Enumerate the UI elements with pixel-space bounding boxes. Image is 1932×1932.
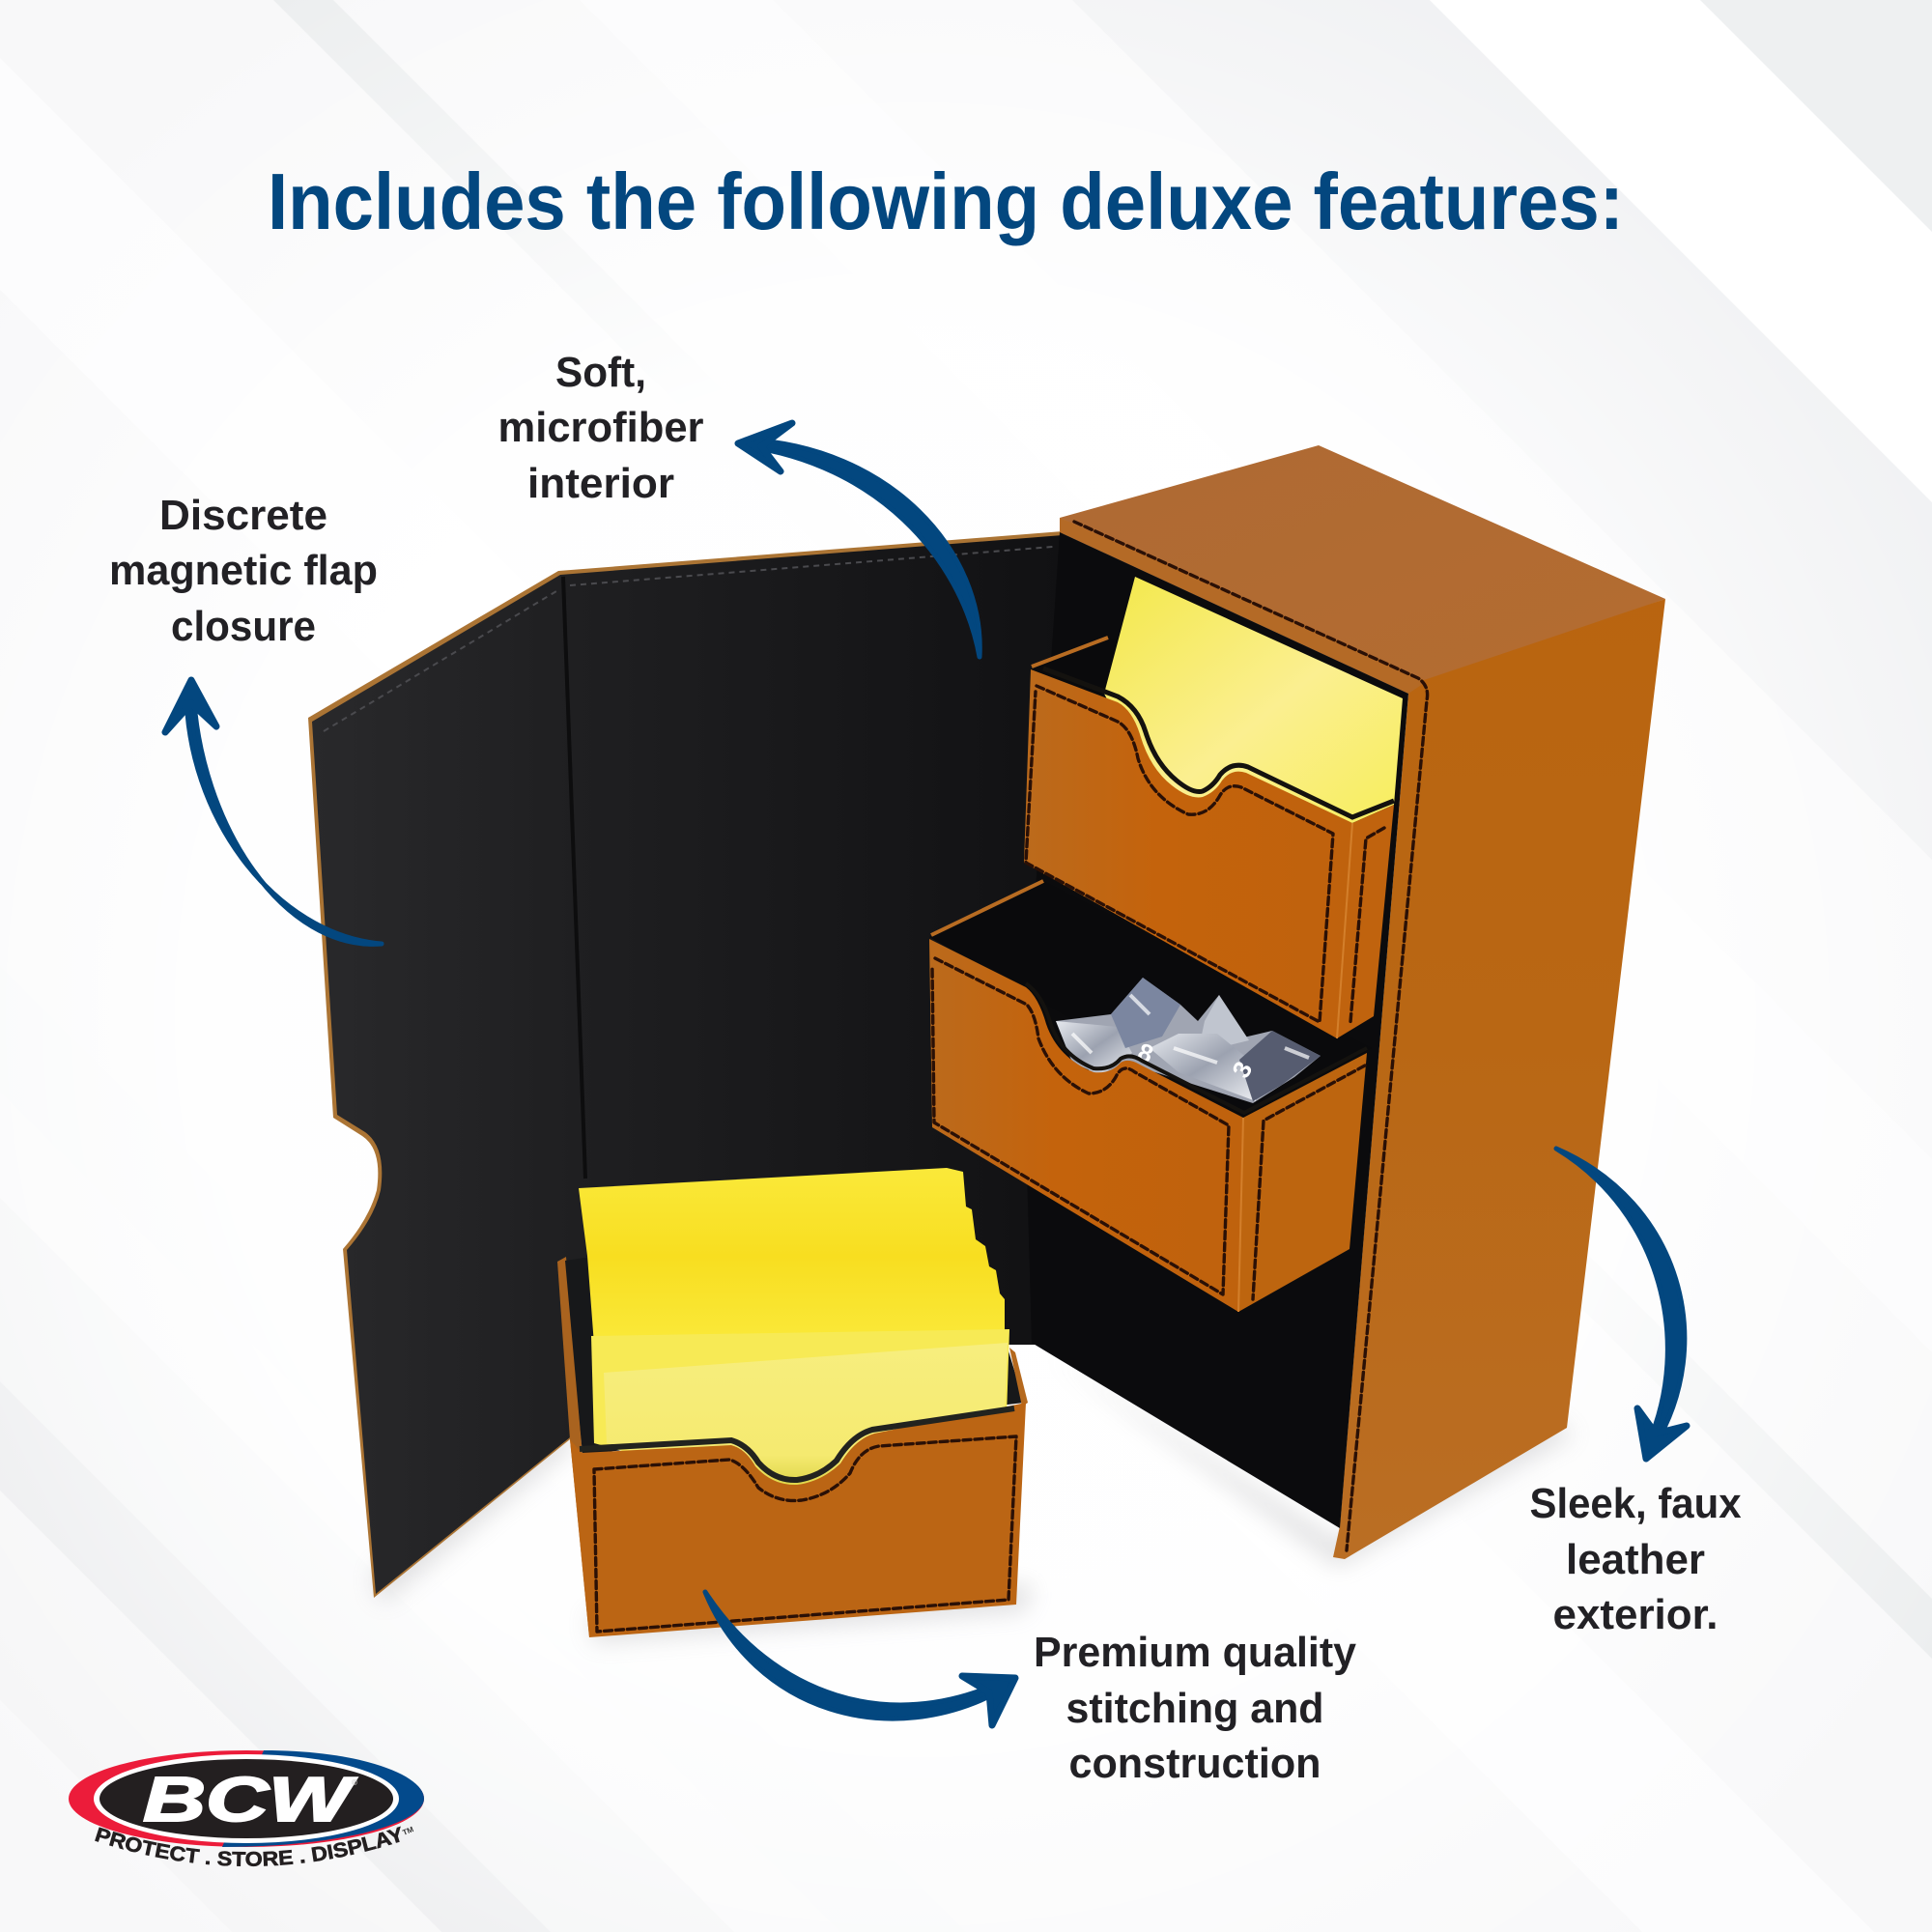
- lower drawer: [929, 881, 1372, 1312]
- caption: discrete magnetic flap closure: closure: [171, 603, 316, 650]
- card box: [557, 1168, 1028, 1637]
- card box interior: [565, 1258, 1024, 1455]
- caption: premium stitching and construction: construction: [1068, 1740, 1321, 1787]
- upper drawer front: [1024, 669, 1352, 1038]
- card box front: [570, 1403, 1026, 1637]
- caption: discrete magnetic flap closure: [109, 492, 378, 650]
- flap and back panel: [308, 531, 1063, 1598]
- dice: 3: [1226, 1056, 1258, 1083]
- arrow: to interior caption: [738, 423, 980, 657]
- caption: premium stitching and construction: stitching and: [1066, 1685, 1323, 1732]
- caption: discrete magnetic flap closure: magnetic flap: [109, 547, 378, 594]
- tower frame stitching: [1074, 522, 1428, 1550]
- caption: discrete magnetic flap closure: Discrete: [159, 492, 327, 539]
- front yellow cards: [591, 1329, 1009, 1492]
- caption: soft microfiber interior: microfiber: [498, 404, 703, 451]
- lower drawer interior: [929, 881, 1372, 1118]
- logo: BCW: BCW: [143, 1764, 356, 1834]
- upper drawer side: [1337, 805, 1394, 1038]
- upper drawer: [1024, 577, 1403, 1038]
- logo: BCW: [69, 1750, 424, 1866]
- caption: premium stitching and construction: [1034, 1629, 1357, 1787]
- logo: BCW: TM: [401, 1825, 415, 1837]
- tower right face: [1060, 518, 1665, 1559]
- caption: soft microfiber interior: interior: [527, 460, 674, 507]
- stacked yellow cards: [579, 1168, 1005, 1345]
- title: Includes the following deluxe features:: [268, 156, 1624, 246]
- lower drawer front: [929, 939, 1243, 1312]
- arrow: to flap closure caption: [165, 680, 382, 944]
- caption: soft microfiber interior: Soft,: [555, 349, 646, 396]
- tower opening: [1024, 532, 1408, 1528]
- dice: [1056, 978, 1321, 1103]
- card box left rim: [557, 1257, 589, 1637]
- arrow: to stitching caption: [705, 1592, 1015, 1725]
- caption: soft microfiber interior: [498, 349, 703, 507]
- ground shadows: [372, 1352, 1575, 1642]
- lower drawer side: [1238, 1053, 1367, 1312]
- upper drawer yellow card: [1104, 577, 1403, 823]
- dice: 8: [1134, 1037, 1157, 1069]
- caption: sleek faux leather exterior: exterior.: [1553, 1591, 1718, 1638]
- caption: premium stitching and construction: Premium quality: [1034, 1629, 1357, 1676]
- caption: sleek faux leather exterior: leather: [1566, 1536, 1705, 1583]
- tower top frame band: [1060, 518, 1426, 694]
- arrow: to exterior caption: [1556, 1149, 1687, 1459]
- upper drawer interior: [1031, 638, 1352, 823]
- card box right rim: [1009, 1348, 1028, 1406]
- logo: BCW: ®: [352, 1778, 357, 1787]
- logo: BCW: PROTECT . STORE . DISPLAY: [95, 1826, 401, 1866]
- tower top face: [1060, 445, 1665, 688]
- product: deck box: [308, 445, 1665, 1642]
- caption: sleek faux leather exterior: Sleek, faux: [1530, 1480, 1742, 1527]
- caption: sleek faux leather exterior: [1530, 1480, 1742, 1638]
